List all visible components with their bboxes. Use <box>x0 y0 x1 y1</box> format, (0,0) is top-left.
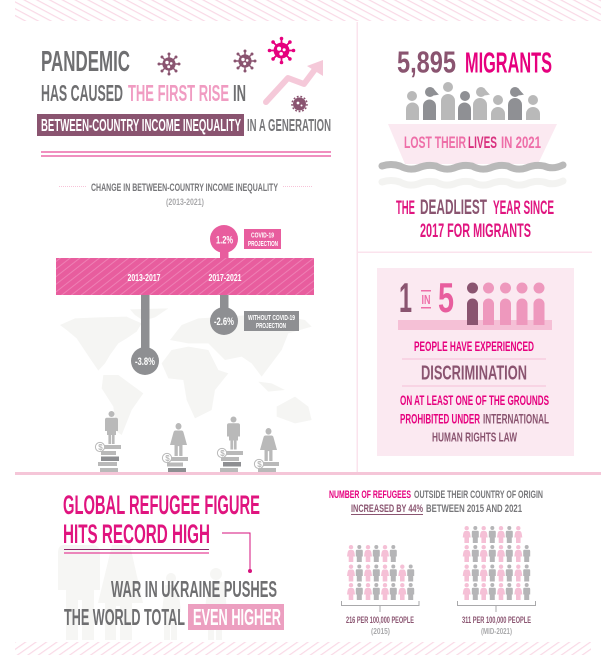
icon: five people <box>467 282 544 325</box>
icon: virus 3 <box>268 37 295 64</box>
title: BETWEEN-COUNTRY INCOME INEQUALITY <box>41 115 241 135</box>
pictogram: 2015 <box>347 545 414 600</box>
bracket: 2015 <box>342 601 419 612</box>
diverging bar chart <box>56 225 314 375</box>
text: grounds: INTERNATIONAL <box>483 412 549 426</box>
title: PANDEMIC <box>41 46 130 78</box>
boat caption: IN 2021 <box>501 134 541 152</box>
refugees subheading: INCREASED BY 44% <box>351 503 423 515</box>
man on tall coin stack <box>95 411 121 472</box>
label: without covid-19 projection: PROJECTION <box>256 323 286 330</box>
chart heading: (2013-2021) <box>166 197 204 207</box>
marker: -3.8%: -3.8% <box>135 356 155 368</box>
icon: virus 4 <box>292 96 307 112</box>
label: 216 per 100,000: (2015) <box>371 626 390 636</box>
stat: 1 in 5: 1 <box>399 274 412 321</box>
refugees subheading <box>329 489 543 515</box>
family silhouette <box>58 545 227 640</box>
label: 311 per 100,000: 311 PER 100,000 PEOPLE <box>462 615 531 626</box>
deadliest year text: THE <box>396 198 415 219</box>
marker: -3.8% <box>131 295 159 375</box>
woman on short coin stack: $ <box>165 454 170 463</box>
migrants headline <box>397 44 552 80</box>
icon: rising arrow <box>266 60 323 102</box>
war in ukraine text: THE WORLD TOTAL <box>64 604 185 630</box>
label: covid-19 projection <box>244 229 281 249</box>
bar: period band <box>56 258 314 295</box>
title: IN <box>233 80 246 106</box>
migrants headline: 5,895 <box>397 44 456 80</box>
refugees subheading: NUMBER OF REFUGEES <box>329 489 411 501</box>
war in ukraine text <box>64 576 284 630</box>
woman on short coin stack <box>162 423 188 472</box>
label: without covid-19 projection <box>244 311 299 331</box>
label: 311 per 100,000: (MID-2021) <box>481 626 512 636</box>
label: 2017-2021: 2017-2021 <box>208 273 242 284</box>
icon: virus 1 <box>158 52 180 76</box>
refugee headline <box>63 490 260 554</box>
label: 216 per 100,000: 216 PER 100,000 PEOPLE <box>346 615 414 626</box>
icon: virus 2 <box>234 50 256 72</box>
stat: 1 in 5: 5 <box>438 274 454 321</box>
connector arrow <box>222 533 252 573</box>
people on boat <box>406 82 540 120</box>
title: HAS CAUSED <box>41 80 123 106</box>
title double rule <box>41 151 331 157</box>
chart heading: CHANGE IN BETWEEN-COUNTRY INCOME INEQUALITY <box>91 182 278 194</box>
panel: discrimination <box>377 268 574 456</box>
pictogram: mid-2021 <box>463 526 530 600</box>
woman on lowest coin stack <box>254 428 279 472</box>
marker: 1.2%: 1.2% <box>216 234 233 246</box>
deadliest year text: DEADLIEST <box>420 196 487 219</box>
label: 311 per 100,000 <box>462 615 531 636</box>
boat hull <box>388 124 557 164</box>
war in ukraine text: EVEN HIGHER <box>193 604 281 630</box>
boat caption: LOST THEIR <box>404 134 466 152</box>
bracket: mid-2021 <box>458 601 536 612</box>
title: IN A GENERATION <box>247 115 331 135</box>
label: 216 per 100,000 <box>346 615 414 636</box>
label: without covid-19 projection: WITHOUT COVID-19 <box>248 315 295 322</box>
text: grounds: PROHIBITED UNDER <box>400 412 480 426</box>
man on medium coin stack: $ <box>220 449 225 458</box>
bottom hatched band <box>15 642 591 655</box>
refugee headline: HITS RECORD HIGH <box>63 519 210 549</box>
man on medium coin stack <box>217 416 243 472</box>
text: grounds: HUMAN RIGHTS LAW <box>432 430 517 444</box>
top hatched band <box>15 0 601 21</box>
boat caption: LIVES <box>468 134 497 152</box>
deadliest year text <box>396 196 554 242</box>
waves <box>382 164 563 185</box>
woman on lowest coin stack: $ <box>257 460 262 469</box>
chart heading <box>59 182 312 207</box>
text: grounds <box>400 393 549 444</box>
title <box>37 46 331 136</box>
text: discrimination: DISCRIMINATION <box>421 362 527 384</box>
marker: -2.6%: -2.6% <box>214 316 234 328</box>
label: covid-19 projection: COVID-19 <box>251 232 274 240</box>
marker: 1.2% <box>210 225 238 258</box>
title: THE FIRST RISE <box>128 80 229 106</box>
world map <box>60 308 312 435</box>
man on tall coin stack: $ <box>98 443 103 452</box>
stat: 1 in 5: IN <box>422 292 430 307</box>
label: covid-19 projection: PROJECTION <box>248 241 278 248</box>
refugees subheading: BETWEEN 2015 AND 2021 <box>426 503 522 515</box>
refugee headline: GLOBAL REFUGEE FIGURE <box>63 490 260 520</box>
war in ukraine text: WAR IN UKRAINE PUSHES <box>111 576 277 602</box>
stat: 1 in 5 <box>399 274 454 321</box>
marker: -2.6% <box>210 295 238 335</box>
label: 2013-2017: 2013-2017 <box>128 273 161 284</box>
